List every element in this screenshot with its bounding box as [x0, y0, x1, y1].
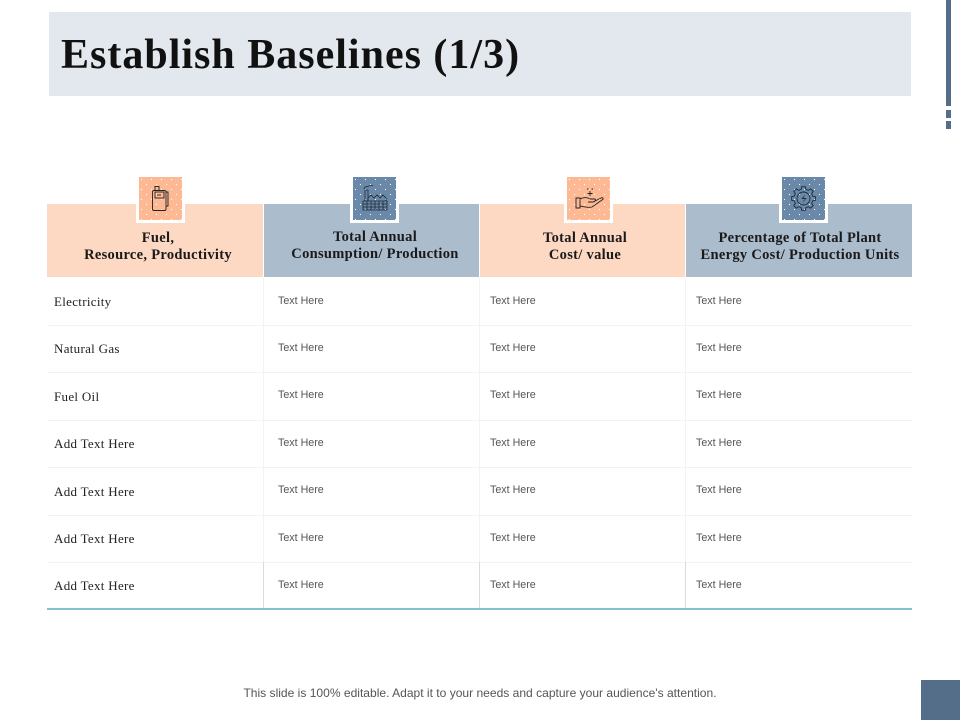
- row 2: Text Here: [490, 342, 536, 354]
- row 3: [54, 389, 742, 404]
- row 3: Fuel Oil: [54, 389, 99, 404]
- row 1: [54, 294, 742, 309]
- title banner: [49, 12, 911, 96]
- row 1: Text Here: [490, 295, 536, 307]
- row 1: Electricity: [54, 294, 111, 309]
- row 3: Text Here: [490, 389, 536, 401]
- header text: cost: [543, 230, 627, 263]
- header text: percentage: [700, 230, 899, 263]
- footer note: This slide is 100% editable. Adapt it to your needs and capture your audience's attention.: [243, 686, 717, 700]
- header text: cost: Total Annual: [543, 230, 627, 246]
- row 5: Text Here: [490, 484, 536, 496]
- row 6: Text Here: [696, 532, 742, 544]
- row 4: Text Here: [696, 437, 742, 449]
- row 2: Text Here: [696, 342, 742, 354]
- row 3: Text Here: [696, 389, 742, 401]
- row 7: Text Here: [696, 579, 742, 591]
- row 3: Text Here: [278, 389, 324, 401]
- header text: percentage: Energy Cost/ Production Units: [701, 247, 899, 263]
- icon: hand with sparkle: [564, 175, 613, 223]
- icon: gear with bolt: [779, 175, 828, 223]
- header cell: percentage: [686, 204, 912, 277]
- row 6: Text Here: [490, 532, 536, 544]
- icon: fuel pump: [136, 175, 185, 223]
- header text: fuel: Fuel,: [142, 230, 174, 246]
- header cell: fuel: [47, 204, 263, 277]
- row 7: Add Text Here: [54, 578, 135, 593]
- header cell: cost: [480, 204, 685, 277]
- title: Establish Baselines (1/3): [61, 32, 520, 78]
- row 4: Text Here: [278, 437, 324, 449]
- row 2: Natural Gas: [54, 341, 120, 356]
- row 7: Text Here: [490, 579, 536, 591]
- row 4: Text Here: [490, 437, 536, 449]
- corner square: [921, 680, 960, 720]
- row 1: Text Here: [696, 295, 742, 307]
- header text: consumption: Total Annual: [333, 229, 417, 245]
- header text: consumption: [291, 229, 459, 262]
- row 2: Text Here: [278, 342, 324, 354]
- row 7: Text Here: [278, 579, 324, 591]
- row 6: [54, 531, 742, 546]
- row 2: [54, 341, 742, 356]
- icon: factory: [350, 175, 399, 223]
- row 5: Text Here: [696, 484, 742, 496]
- row 5: Text Here: [278, 484, 324, 496]
- header text: percentage: Percentage of Total Plant: [718, 230, 882, 246]
- row 6: Text Here: [278, 532, 324, 544]
- row 4: Add Text Here: [54, 436, 135, 451]
- row 5: [54, 484, 742, 499]
- row 6: Add Text Here: [54, 531, 135, 546]
- row 7: [54, 578, 742, 593]
- corner accent bars: [946, 0, 951, 129]
- row 1: Text Here: [278, 295, 324, 307]
- header text: fuel: Resource, Productivity: [84, 247, 232, 263]
- header text: fuel: [84, 230, 232, 263]
- header cell: consumption: [264, 204, 479, 277]
- row 5: Add Text Here: [54, 484, 135, 499]
- header text: cost: Cost/ value: [549, 247, 621, 263]
- row 4: [54, 436, 742, 451]
- header text: consumption: Consumption/ Production: [291, 246, 459, 262]
